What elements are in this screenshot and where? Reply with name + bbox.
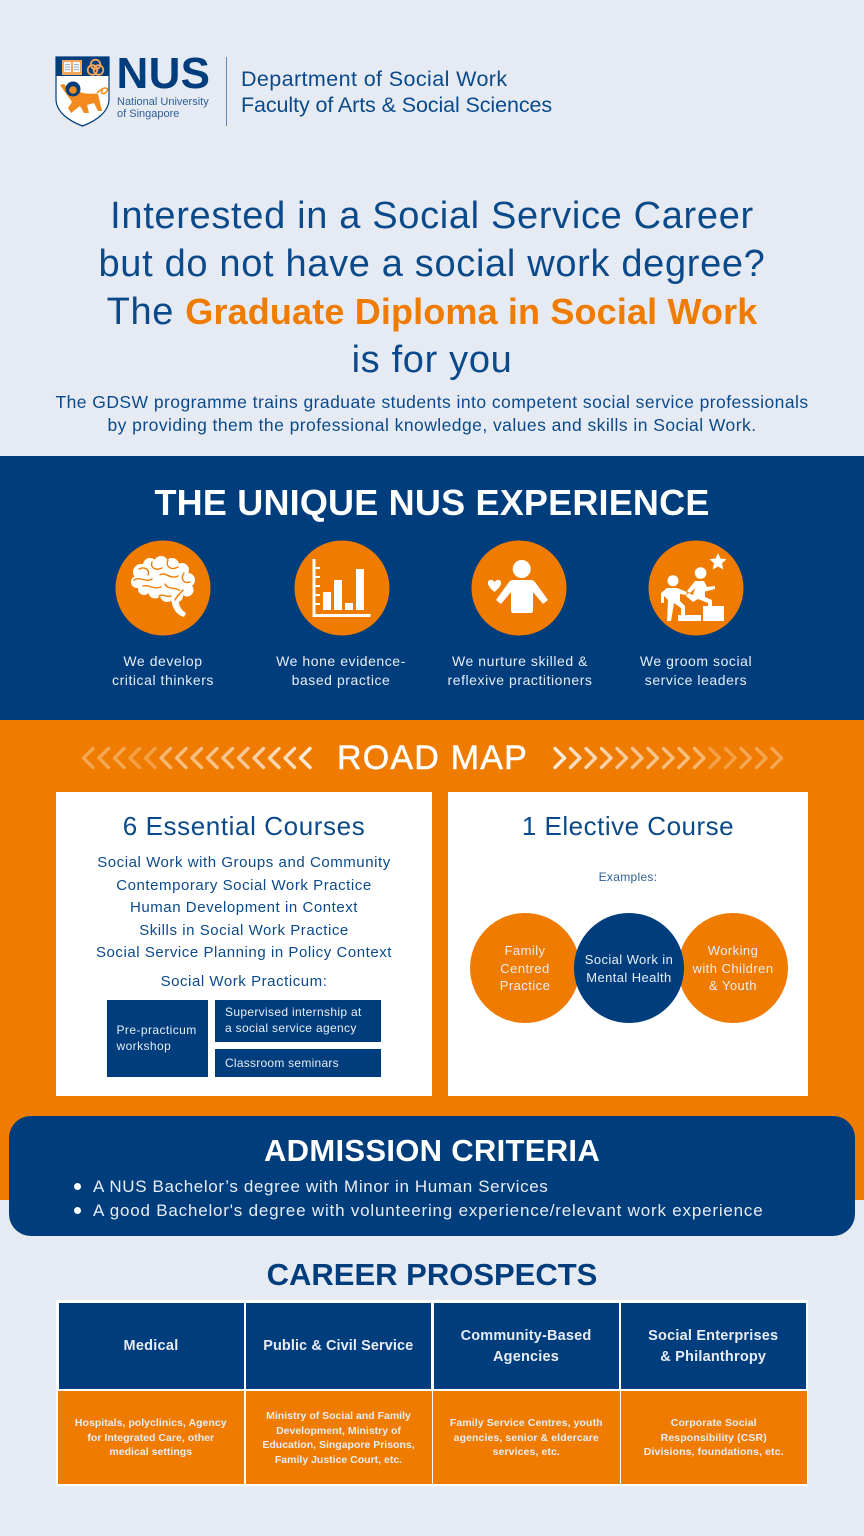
department name	[241, 67, 552, 117]
header: social enterprises and philanthropy: & Philanthropy	[660, 1348, 766, 1364]
road map arrows right	[553, 746, 784, 770]
header: medical: Medical	[124, 1338, 178, 1354]
caption: critical thinkers	[112, 653, 214, 688]
career prospects heading: CAREER PROSPECTS	[267, 1257, 597, 1292]
caption: evidence-based: We hone evidence-	[276, 653, 406, 669]
headline: but do not have a social work degree?	[98, 243, 766, 285]
header: social enterprises and philanthropy	[621, 1302, 806, 1388]
header: social enterprises and philanthropy: Social Enterprises	[648, 1328, 778, 1344]
practicum box: supervised internship	[215, 1000, 381, 1042]
header: public and civil service: Public & Civil Service	[263, 1338, 413, 1354]
panel: essential courses	[56, 792, 432, 1096]
detail: community-based agencies	[433, 1391, 620, 1484]
intro paragraph	[55, 392, 809, 435]
panel: the unique NUS experience	[0, 456, 864, 720]
header: community-based agencies	[434, 1302, 618, 1388]
header: community-based agencies: Community-Based	[461, 1328, 591, 1344]
circle: social work in mental health: Social Work in	[585, 952, 673, 967]
circle: family centred practice: Family	[504, 943, 545, 958]
detail: public and civil service: Education, Singapore Prisons,	[262, 1439, 415, 1451]
logo: NUS shield and wordmark: National University	[117, 96, 209, 108]
intro paragraph: The GDSW programme trains graduate students into competent social service professionals	[55, 392, 809, 412]
header: medical	[58, 1302, 244, 1388]
detail: social enterprises: Corporate Social	[671, 1417, 757, 1429]
essential courses heading: 6 Essential Courses	[123, 811, 365, 841]
intro paragraph: by providing them the professional knowledge, values and skills in Social Work.	[107, 415, 756, 435]
road map arrows left	[82, 746, 312, 770]
detail: medical: for Integrated Care, other	[87, 1432, 214, 1444]
detail: medical	[58, 1391, 244, 1484]
caption: practitioners: reflexive practitioners	[448, 672, 592, 688]
panel: road map	[0, 720, 864, 1200]
detail: public and civil service: Family Justice Court, etc.	[275, 1454, 402, 1466]
detail: community-based agencies: Family Service Centres, youth	[450, 1417, 603, 1429]
experience captions	[112, 653, 752, 688]
circle: social work in mental health: Mental Health	[586, 970, 672, 984]
caption: leaders: We groom social	[640, 653, 752, 669]
detail: social enterprises: Divisions, foundations, etc.	[644, 1446, 784, 1458]
practicum box: pre-practicum workshop: Pre-practicum	[116, 1023, 197, 1037]
caption: critical thinkers: We develop	[123, 653, 203, 669]
detail: medical: medical settings	[109, 1446, 192, 1458]
headline: is for you	[352, 339, 512, 381]
header: community-based agencies: Agencies	[493, 1348, 559, 1364]
caption: leaders	[640, 653, 752, 688]
practicum box: classroom seminars	[215, 1049, 381, 1077]
detail: public and civil service: Ministry of Social and Family	[266, 1410, 411, 1422]
practicum box: supervised internship: Supervised internship at	[225, 1005, 362, 1019]
logo: NUS shield and wordmark: of Singapore	[117, 108, 179, 120]
logo: NUS shield and wordmark	[55, 49, 210, 127]
caption: practitioners	[448, 653, 592, 688]
practicum box: pre-practicum workshop	[106, 1000, 208, 1077]
essential course list: Social Service Planning in Policy Context	[96, 944, 392, 961]
department name: Department of Social Work	[241, 67, 508, 91]
detail: community-based agencies: services, etc.	[493, 1446, 560, 1458]
panel: admission criteria	[9, 1116, 855, 1236]
road map heading: ROAD MAP	[337, 739, 528, 777]
detail: social enterprises	[621, 1391, 806, 1484]
admission bullet list	[74, 1177, 763, 1220]
detail: social enterprises: Responsibility (CSR)	[661, 1432, 767, 1444]
career prospects table	[56, 1300, 808, 1486]
icon: person with heart	[472, 540, 566, 636]
essential course list: Social Work with Groups and Community	[97, 854, 391, 871]
admission heading: ADMISSION CRITERIA	[264, 1133, 600, 1168]
icon: brain	[116, 540, 210, 636]
essential course list: Contemporary Social Work Practice	[116, 876, 372, 894]
circle: family centred practice: Practice	[500, 978, 550, 993]
circle: social work in mental health	[574, 913, 684, 1023]
circle: family centred practice	[470, 913, 580, 1023]
essential course list	[96, 854, 392, 961]
experience heading: THE UNIQUE NUS EXPERIENCE	[154, 482, 710, 523]
logo divider	[226, 57, 227, 126]
header: public and civil service	[246, 1302, 430, 1388]
practicum label: Social Work Practicum:	[161, 973, 327, 990]
logo: NUS shield and wordmark: NUS	[116, 49, 210, 98]
caption: leaders: service leaders	[645, 672, 747, 688]
essential course list: Skills in Social Work Practice	[139, 922, 349, 938]
detail: community-based agencies: agencies, senior & eldercare	[454, 1432, 599, 1444]
circle: working with children and youth	[678, 913, 788, 1023]
caption: evidence-based: based practice	[292, 672, 390, 688]
bullet two: A good Bachelor's degree with volunteering experience/relevant work experience	[93, 1200, 763, 1220]
caption: practitioners: We nurture skilled &	[452, 653, 588, 669]
practicum box: pre-practicum workshop: workshop	[116, 1039, 171, 1053]
headline: Interested in a Social Service Career	[110, 195, 754, 237]
practicum box: classroom seminars: Classroom seminars	[225, 1056, 339, 1070]
practicum box: supervised internship: a social service agency	[225, 1021, 357, 1035]
examples label: Examples:	[599, 870, 657, 884]
circle: working with children and youth: with Children	[692, 960, 774, 976]
icon: bar chart	[294, 540, 390, 636]
headline	[98, 195, 766, 381]
icon: climbing leaders with star	[648, 540, 744, 636]
panel: elective course	[448, 792, 808, 1096]
detail: public and civil service	[246, 1391, 432, 1484]
caption: critical thinkers: critical thinkers	[112, 672, 214, 688]
detail: medical: Hospitals, polyclinics, Agency	[75, 1417, 227, 1429]
bullet one: A NUS Bachelor’s degree with Minor in Human Services	[93, 1177, 548, 1196]
elective heading: 1 Elective Course	[522, 811, 734, 841]
circle: working with children and youth: & Youth	[709, 978, 757, 993]
headline: The Graduate Diploma in Social Work	[107, 291, 757, 333]
caption: evidence-based	[276, 653, 406, 688]
circle: family centred practice: Centred	[500, 960, 550, 976]
department name: Faculty of Arts & Social Sciences	[241, 93, 552, 117]
circle: working with children and youth: Working	[708, 943, 758, 958]
essential course list: Human Development in Context	[130, 899, 358, 916]
detail: public and civil service: Development, Ministry of	[276, 1424, 401, 1436]
